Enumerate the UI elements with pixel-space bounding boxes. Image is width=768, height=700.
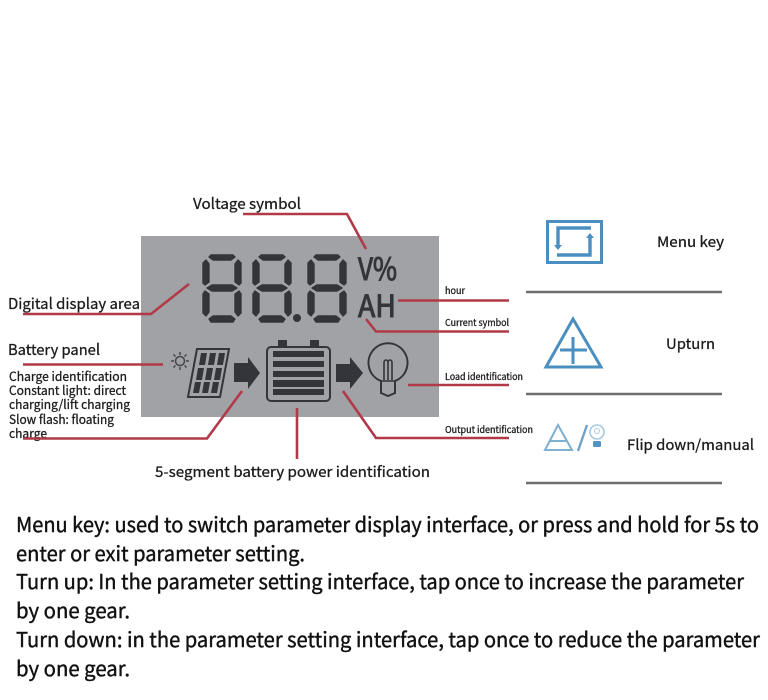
- divider: flip down row: [526, 482, 722, 484]
- label: hour: [398, 283, 509, 300]
- label: hour: hour: [445, 283, 465, 297]
- digit 3: [308, 255, 346, 322]
- label: charge identification: charge: [9, 423, 47, 442]
- text block: key descriptions: Turn up: In the parameter setting interface, tap once to increase the parameter: [16, 565, 744, 595]
- label: current symbol: Current symbol: [445, 315, 509, 329]
- icon: menu key: [548, 222, 602, 262]
- digital display: 88.8: [203, 255, 346, 322]
- label: charge identification: [9, 366, 242, 442]
- text block: key descriptions: Turn down: in the parameter setting interface, tap once to reduce the parameter: [16, 623, 760, 653]
- label: charge identification: Slow flash: floating: [9, 409, 114, 428]
- icon: battery with five segments: [267, 340, 330, 401]
- unit symbols AH: AH: [358, 281, 396, 326]
- icon: light bulb: [368, 343, 408, 396]
- label: battery panel: Battery panel: [8, 339, 100, 360]
- label: load identification: [408, 369, 523, 385]
- label: menu key: Menu key: [657, 231, 724, 252]
- divider: upturn row: [526, 393, 722, 395]
- label: voltage symbol: [193, 193, 366, 249]
- label: output identification: Output identification: [445, 422, 533, 436]
- icon: sun: [171, 352, 189, 370]
- divider: menu key row: [526, 291, 722, 293]
- unit symbols V%: V%: [358, 244, 397, 289]
- digit 2: [253, 255, 291, 322]
- label: voltage symbol: Voltage symbol: [193, 193, 301, 214]
- label: digital display area: [8, 284, 189, 314]
- label: flip down/manual: Flip down/manual: [627, 434, 754, 455]
- label: digital display area: Digital display area: [8, 293, 140, 314]
- text block: key descriptions: by one gear.: [16, 652, 130, 682]
- label: charge identification: Charge identification: [9, 366, 127, 385]
- icon: upturn triangle with plus: [546, 319, 601, 367]
- label: charge identification: Constant light: direct: [9, 380, 126, 399]
- label: current symbol: [366, 315, 509, 332]
- label: charge identification: charging/lift charging: [9, 394, 130, 413]
- decimal point: [293, 314, 301, 322]
- label: output identification: [343, 391, 533, 438]
- arrow: battery to load: [336, 357, 363, 389]
- label: 5-segment battery power identification: 5-segment battery power identification: [155, 461, 430, 482]
- icon: flip down and manual bulb: [545, 425, 604, 451]
- text block: key descriptions: [16, 508, 760, 682]
- text block: key descriptions: enter or exit parameter setting.: [16, 537, 305, 567]
- digit 1: [203, 255, 241, 322]
- panel: LCD display: [141, 236, 439, 417]
- text block: key descriptions: by one gear.: [16, 594, 130, 624]
- arrow: solar to battery: [234, 357, 260, 389]
- text block: key descriptions: Menu key: used to switch parameter display interface, or press and hold for 5s to: [16, 508, 759, 538]
- label: upturn: Upturn: [666, 333, 715, 354]
- icon: solar panel: [188, 349, 229, 397]
- label: load identification: Load identification: [445, 369, 523, 383]
